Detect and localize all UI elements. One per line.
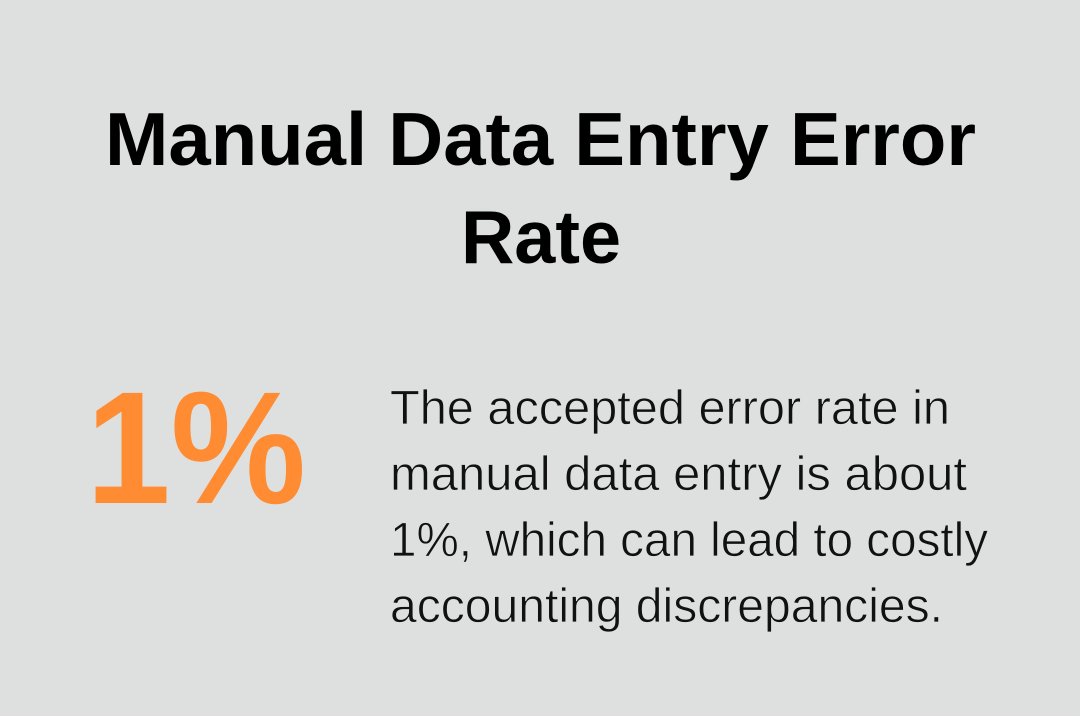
description text: 1%, which can lead to costly [390,514,988,567]
title: Rate [461,195,621,279]
title: Manual Data Entry Error [105,97,976,181]
title [105,97,976,279]
description text [390,382,988,633]
description text: The accepted error rate in [390,382,950,435]
description text: manual data entry is about [390,448,967,501]
big statistic: 1%: 1% [86,358,306,537]
description text: accounting discrepancies. [390,580,943,633]
